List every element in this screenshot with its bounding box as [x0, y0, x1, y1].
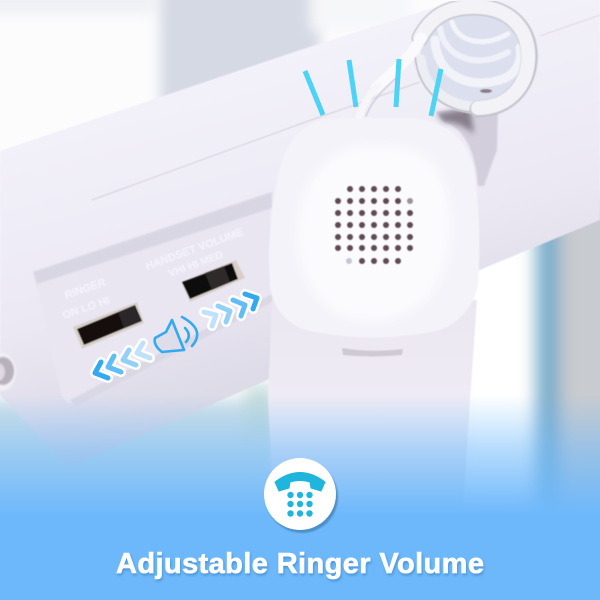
- ringer switch: [73, 302, 144, 349]
- ring lines: [305, 59, 441, 116]
- embossed labels: VHI HI MED: [167, 249, 225, 280]
- shadow column under coil: [436, 104, 498, 186]
- embossed labels: RINGER: [63, 277, 107, 302]
- coiled cord: [359, 7, 532, 118]
- front loop: [420, 7, 529, 109]
- recess panel: [33, 192, 272, 403]
- bottom blue fade: [0, 395, 600, 600]
- slot: [342, 348, 403, 356]
- coil interior: [420, 10, 532, 110]
- handset head: [269, 118, 479, 338]
- title: Adjustable Ringer Volume: [116, 548, 484, 580]
- phone base body: [0, 0, 600, 468]
- ear cup: [297, 146, 450, 321]
- handset stem: [268, 300, 477, 510]
- icon: speaker: [155, 317, 197, 352]
- side screw hole: [0, 353, 16, 391]
- handset: [268, 118, 479, 510]
- left arrows: volume down: [95, 343, 150, 378]
- speaker holes: [335, 186, 413, 264]
- icon: telephone badge: [264, 458, 338, 533]
- right arrows: volume up: [204, 294, 257, 326]
- embossed labels: [61, 226, 245, 322]
- cord tail: [376, 38, 421, 88]
- embossed labels: ON LO HI: [61, 295, 111, 322]
- embossed labels: HANDSET VOLUME: [144, 226, 245, 273]
- handset volume switch: [182, 260, 245, 302]
